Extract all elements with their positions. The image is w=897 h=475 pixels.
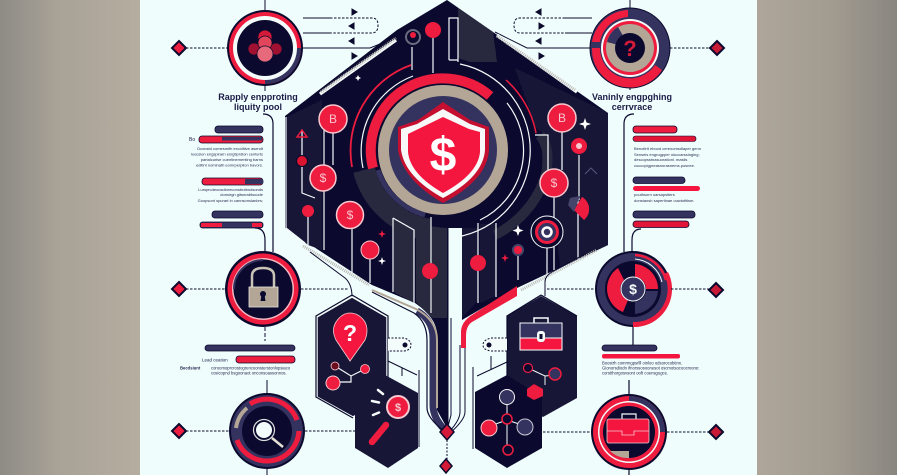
bar (602, 345, 657, 351)
dashed connector briefcase left (543, 431, 591, 433)
text block lower left (180, 345, 295, 376)
paragraph: descopsstnasuorationl. maslis (634, 157, 687, 162)
coin: dollar right: $ (551, 176, 558, 190)
paragraph: Becdsiunt (180, 366, 201, 370)
diamond top right (710, 41, 724, 55)
outline wires (372, 292, 445, 432)
paragraph: donsirgn gitsnrabtsoode (220, 192, 264, 197)
paragraph: cosicopnd bsgoonaot onconsoassonnos. (211, 370, 287, 376)
lens symbol: $ (395, 402, 401, 414)
circle: coins top left (227, 0, 303, 91)
background left band (0, 0, 140, 475)
bracket line left (263, 114, 273, 252)
navy inner arc (378, 170, 425, 215)
tan strip (372, 290, 437, 408)
coin stack icon (248, 30, 282, 62)
heading right: Vaninly engpghing (592, 92, 672, 102)
tag dot left (402, 342, 408, 348)
dashed connector top right (670, 47, 710, 49)
magnifier icon (254, 420, 283, 447)
dashed tag left (388, 338, 411, 351)
red outer arcs (351, 65, 411, 167)
coin: dollar left (310, 165, 336, 191)
label: Lead ceation (202, 358, 228, 362)
paragraph: Lurspnoteoosdinreconstrutbodsonds (198, 187, 263, 192)
paragraph: Dconstd comesmith excolitive asendt (197, 146, 264, 151)
wire to briefcase hexagon (545, 254, 585, 296)
coin: gear right (571, 138, 587, 154)
text block left (189, 126, 264, 228)
shield outer (398, 102, 489, 203)
diamond briefcase (709, 425, 723, 439)
red handle (372, 425, 386, 442)
paragraph: loocsion engspirarn esrgtiprdion centerts (191, 152, 263, 156)
coin: dollar right (540, 169, 568, 197)
coin: bitcoin right: B (558, 111, 566, 125)
dashed connector top left (186, 47, 227, 49)
coin lens (387, 396, 409, 418)
text block lower right (602, 345, 700, 376)
padlock icon (249, 268, 278, 307)
sensor top (406, 30, 420, 44)
textured stripe right (462, 224, 496, 318)
textured stripe left (394, 218, 414, 303)
question mark: ? (623, 36, 637, 61)
textured top facet (458, 8, 497, 62)
coin: dollar lower left: $ (347, 208, 354, 222)
red band lower right (461, 286, 517, 348)
gear node (531, 216, 563, 248)
central emblem (351, 65, 536, 210)
bars (212, 211, 263, 218)
angle wire left (388, 361, 419, 447)
question mark: ? (343, 320, 357, 346)
hexagon body (285, 0, 608, 428)
textured stripe center (416, 225, 447, 318)
paragraph: Benotirtt ebood cereoomsdlaper genn (634, 146, 701, 151)
stem below lock (264, 327, 266, 341)
node network (326, 362, 370, 390)
bracket line right (624, 114, 634, 252)
gray shaded arc (364, 170, 430, 230)
coin: dollar lower left (336, 202, 364, 228)
central hexagon panel (285, 0, 608, 428)
paragraph: pouthsorn oarsapsiters (634, 192, 675, 197)
paragraph: coroomoprcrostogrencoonsterstonlopsiaco (211, 366, 291, 370)
central conduit (372, 228, 465, 460)
bars (633, 177, 685, 184)
bracket line left lower (255, 228, 265, 252)
coin symbol: $ (629, 281, 637, 297)
paragraph: donstansh sapertinae ouwtotitism. (634, 198, 694, 203)
warning triangle (297, 130, 307, 137)
circle: magnifier (229, 380, 305, 475)
bars (633, 211, 695, 218)
shield white border (401, 109, 485, 198)
coin nodes (296, 22, 597, 279)
textured right facet (515, 68, 608, 268)
hexagon: briefcase (507, 295, 577, 417)
bars (215, 126, 263, 133)
center node (502, 414, 512, 424)
briefcase icon (607, 414, 649, 443)
bars (633, 126, 677, 133)
dashed connector coin right (671, 288, 709, 290)
textured left facet (287, 100, 322, 250)
shine marks (372, 390, 383, 415)
diamond: conduit lower (440, 459, 452, 473)
diamond magnifier (172, 424, 186, 438)
caret outline (585, 168, 597, 174)
navy conduit (417, 311, 445, 430)
bars (202, 178, 263, 185)
red shield node (527, 384, 543, 400)
paragraph: Gionorsdiodn ifnorssosoonesot oscmotsocoocmoror. (602, 366, 700, 370)
white circuit lines (286, 18, 579, 313)
connector lines top right (495, 9, 592, 59)
briefcase icon (520, 318, 562, 350)
connector lines top left (303, 9, 397, 59)
dashed tag right (483, 338, 507, 351)
heading left: liquity pool (234, 102, 282, 112)
hexagon: question pin (316, 295, 388, 418)
circle: coin right (595, 251, 672, 345)
diamond lock (172, 282, 186, 296)
tag dot right (486, 342, 492, 348)
circle: lock (225, 251, 301, 327)
sparkles (355, 75, 591, 265)
heading left: Rapply enpproting (218, 92, 298, 102)
wire to question hexagon (310, 252, 352, 297)
tan ring (384, 90, 502, 210)
paragraph: Goopsont spurart in cannsonslanbrs; (198, 198, 263, 203)
dashed connector coin left (547, 288, 595, 290)
left node (481, 420, 497, 436)
background right band (757, 0, 897, 475)
half gauge (568, 196, 589, 220)
label: Bo (189, 137, 195, 143)
coin: bitcoin right (548, 104, 576, 132)
dashed connector briefcase right (667, 431, 709, 433)
paragraph: editint nominath eomrperplion bavors. (196, 162, 263, 168)
red sparkles (378, 230, 509, 262)
dashed connector lock left (186, 288, 225, 290)
coin: bitcoin left (319, 105, 347, 133)
diamond: conduit upper (440, 424, 454, 440)
paragraph: Senseis engrogpper oiuccarssinging; (634, 152, 700, 157)
bracket line right lower (632, 229, 641, 252)
pin icon (334, 313, 367, 361)
hatched edge strips (303, 35, 597, 290)
shield red face (408, 117, 480, 193)
paragraph: corstthorgosvsont ooft coensgugce. (602, 370, 668, 376)
coin: small red dots (296, 22, 523, 279)
bar (205, 345, 295, 351)
coin: bitcoin left: B (329, 112, 337, 126)
text block right (633, 126, 701, 228)
angle wire right (473, 356, 507, 449)
paragraph: Boostrh comrmgpsrlll oinloo odsorocobtinn. (602, 360, 682, 366)
dashed connector magnifier right (305, 430, 355, 432)
hexagon: network (475, 375, 543, 468)
top node (500, 390, 514, 404)
node lines (490, 397, 525, 445)
dashed connector lock right (301, 288, 348, 290)
bar (602, 354, 680, 358)
coin: dollar left: $ (320, 171, 327, 185)
paragraph: coccopigpreasnorasnems.pusnee. (634, 163, 695, 168)
diamond top left (172, 41, 186, 55)
circle: question top right (590, 0, 670, 90)
dollar sign: $ (430, 129, 457, 182)
right node (517, 419, 533, 435)
bottom node (503, 445, 513, 455)
paragraph: partalcurise cuentinementing barns (201, 157, 263, 162)
node network (524, 364, 561, 385)
bar (236, 356, 295, 363)
hexagon: magnifier (355, 375, 418, 468)
dashed connector magnifier left (186, 430, 229, 432)
heading right: cerrvrace (612, 102, 652, 112)
circle: briefcase right (591, 380, 667, 475)
diamond coin (709, 283, 723, 297)
